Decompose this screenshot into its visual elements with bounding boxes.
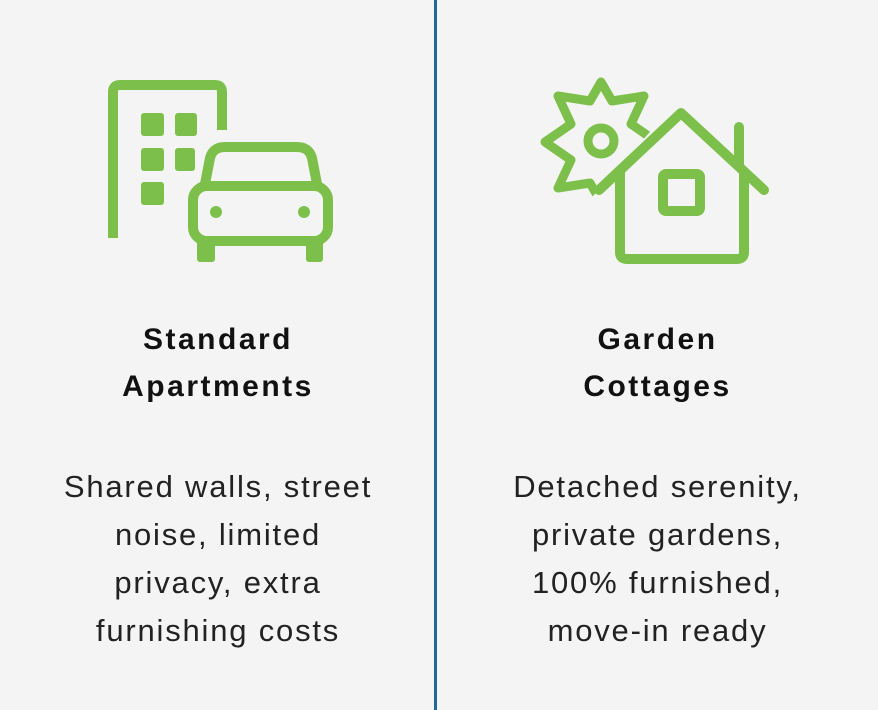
text: apartments description [64, 469, 372, 648]
heading: standard apartments: Standard [143, 323, 293, 356]
text: apartments description: noise, limited [115, 517, 321, 552]
text: cottages description: 100% furnished, [532, 565, 783, 600]
icon: house with sun [540, 78, 769, 264]
divider [434, 0, 437, 710]
panel: standard apartments [64, 80, 372, 648]
heading: garden cottages: Garden [597, 323, 718, 356]
text: apartments description: Shared walls, street [64, 469, 372, 504]
text: cottages description [513, 469, 802, 648]
heading: garden cottages [583, 323, 732, 403]
text: cottages description: private gardens, [532, 517, 783, 552]
heading: standard apartments [122, 323, 314, 403]
text: apartments description: privacy, extra [114, 565, 322, 600]
panel: garden cottages [513, 78, 802, 648]
text: cottages description: Detached serenity, [513, 469, 802, 504]
heading: garden cottages: Cottages [583, 370, 732, 403]
text: apartments description: furnishing costs [96, 613, 340, 648]
heading: standard apartments: Apartments [122, 370, 314, 403]
icon: building and car [108, 80, 333, 262]
text: cottages description: move-in ready [548, 613, 767, 648]
